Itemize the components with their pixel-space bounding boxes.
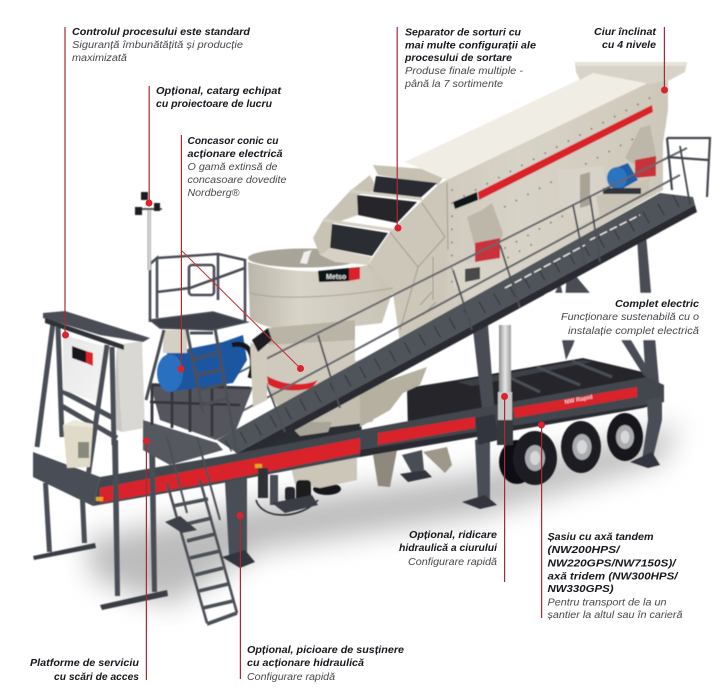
- callout: service platforms: Platforme de serviciu: [30, 657, 140, 669]
- callout: light mast: Opțional, catarg echipat: [156, 85, 282, 97]
- crusher bowl rim: [248, 248, 362, 268]
- screen top surface: [405, 73, 650, 180]
- light mast: [135, 192, 162, 270]
- blue screen motor: [603, 163, 641, 194]
- callout: chassis axle: Șasiu cu axă tandem: [548, 531, 654, 543]
- leader: crusher motor: [178, 135, 184, 372]
- callout: chassis axle: NW220GPS/NW7150S)/: [548, 558, 677, 570]
- deck 3: [330, 224, 388, 256]
- callout: hydraulic legs: [247, 644, 404, 683]
- callout: service platforms: [30, 657, 140, 683]
- callout: cone crusher: concasoare dovedite: [188, 174, 287, 186]
- screen back decks: [313, 165, 443, 265]
- mobile crushing and screening plant: [33, 62, 725, 624]
- leader: screen: [394, 27, 402, 232]
- red ring: [267, 376, 318, 391]
- rear frame: [37, 323, 117, 447]
- callout: fully electric: Funcționare sustenabilă cu o: [561, 311, 699, 323]
- callout: service platforms: cu scări de acces: [54, 671, 139, 683]
- callout: inclined screen: [594, 26, 656, 51]
- Metso sign: Metso: [326, 274, 346, 281]
- leader: chassis: [538, 422, 545, 618]
- right spring mount: [625, 125, 657, 178]
- callout: cone crusher: O gamă extinsă de: [188, 161, 278, 173]
- white gap behind the electric callout: [545, 293, 725, 340]
- grey side panel: [117, 341, 145, 432]
- red stripe: [478, 105, 653, 200]
- leader: inclined screen: [661, 27, 668, 94]
- callout: light mast: [156, 85, 282, 110]
- main chassis with red stripe: [33, 377, 664, 506]
- callout: chassis axle: șantier la altul sau în carieră: [548, 609, 683, 621]
- callout: screen separator: mai multe configurații ale: [405, 40, 536, 52]
- callout: screen separator: [404, 26, 536, 90]
- lower bracket: [453, 262, 503, 300]
- callout: hydraulic legs: cu acționare hidraulică: [247, 657, 364, 669]
- bottom plate: [320, 248, 372, 265]
- top cage guard rails: [146, 254, 247, 400]
- callout: chassis axle: axă tridem (NW300HPS/: [548, 570, 679, 582]
- callout: fully electric: [561, 298, 699, 337]
- leader: service platforms: [143, 438, 150, 680]
- leader: hydraulic legs: [236, 512, 244, 679]
- callout: cone crusher: Concasor conic cu: [188, 135, 279, 147]
- rear trailer tub: [407, 358, 647, 432]
- callout: chassis axle: NW330GPS): [548, 583, 614, 595]
- callout: inclined screen: Ciur înclinat: [594, 26, 656, 38]
- callout: inclined screen: cu 4 nivele: [602, 39, 656, 51]
- support legs: [33, 397, 662, 610]
- leader: cone crusher: [181, 250, 304, 372]
- control cabinet and roof: [37, 311, 150, 477]
- Metso sign: [318, 267, 360, 282]
- inclined four-deck screen body: [368, 62, 687, 342]
- cream tank: [63, 425, 93, 468]
- callout: cone crusher: Nordberg®: [188, 187, 240, 199]
- top hopper: [575, 62, 687, 84]
- red leader lines and markers: [62, 27, 668, 680]
- callout: hydraulic legs: Configurare rapidă: [247, 671, 335, 683]
- hydraulic pump unit: [256, 468, 318, 515]
- drive bracket: [558, 166, 610, 225]
- deck 1: [373, 176, 437, 200]
- Metso logo: [72, 346, 93, 366]
- callout: fully electric: instalație complet electrică: [568, 325, 699, 337]
- hydraulic screen lift cylinder: [497, 325, 513, 445]
- callout: chassis axle: Pentru transport de la un: [548, 596, 667, 608]
- front frame: [88, 345, 114, 477]
- work lights: [135, 192, 160, 215]
- callout: hydraulic screen lift: Opțional, ridicare: [409, 529, 497, 541]
- roof: [43, 311, 150, 342]
- rear support frame: [473, 235, 662, 417]
- callout: cone crusher: acționare electrică: [188, 148, 283, 160]
- callout: process control: Controlul procesului este standard: [72, 26, 251, 38]
- Metso tag on screen: [453, 192, 478, 209]
- top hood: [373, 165, 443, 185]
- electric motor: [157, 328, 272, 407]
- lower crusher cone: [240, 355, 388, 495]
- leader: mast: [146, 86, 152, 206]
- leader: process control: [62, 27, 69, 338]
- white panel: [63, 335, 107, 403]
- callout: screen separator: Separator de sorturi cu: [405, 26, 522, 38]
- callout: hydraulic legs: Opțional, picioare de susținere: [247, 644, 404, 656]
- ground shadow: [85, 425, 680, 605]
- callout: hydraulic screen lift: [399, 529, 498, 568]
- cone crusher bowl: [248, 250, 393, 391]
- deck 2: [357, 195, 417, 223]
- callout: hydraulic screen lift: hidraulică a ciurului: [399, 542, 498, 554]
- callout: screen separator: Produse finale multiple -: [405, 65, 524, 77]
- callout: process control: [72, 26, 251, 64]
- callout: process control: Siguranță îmbunătățită și producție: [72, 39, 243, 51]
- discharge chute: [360, 367, 452, 487]
- leader: hydraulic lift: [501, 393, 508, 582]
- callout: screen separator: până la 7 sortimente: [404, 78, 503, 90]
- NW Rapid label: NW Rapid: [564, 395, 594, 406]
- lower access stairs: [165, 437, 237, 624]
- left spring mount: [467, 203, 503, 262]
- access ladder: [185, 317, 237, 453]
- tri-axle wheels: [499, 413, 643, 485]
- callout: hydraulic screen lift: Configurare rapidă: [408, 556, 497, 568]
- hydraulic centre leg: [225, 478, 247, 555]
- conveyor walkway: [217, 193, 697, 460]
- bowl spout: [300, 250, 312, 264]
- callout: fully electric: Complet electric: [615, 298, 699, 310]
- callout: screen separator: procesului de sortare: [404, 52, 512, 64]
- callout: cone crusher: [188, 135, 287, 199]
- callout: chassis axle: [548, 531, 683, 621]
- service platform: [143, 383, 253, 465]
- callout: process control: maximizată: [72, 52, 127, 64]
- callout: light mast: cu proiectoare de lucru: [156, 98, 273, 110]
- conveyor handrails: [200, 138, 710, 432]
- callout: chassis axle: (NW200HPS/: [548, 544, 621, 556]
- deck side gussets: [313, 175, 378, 255]
